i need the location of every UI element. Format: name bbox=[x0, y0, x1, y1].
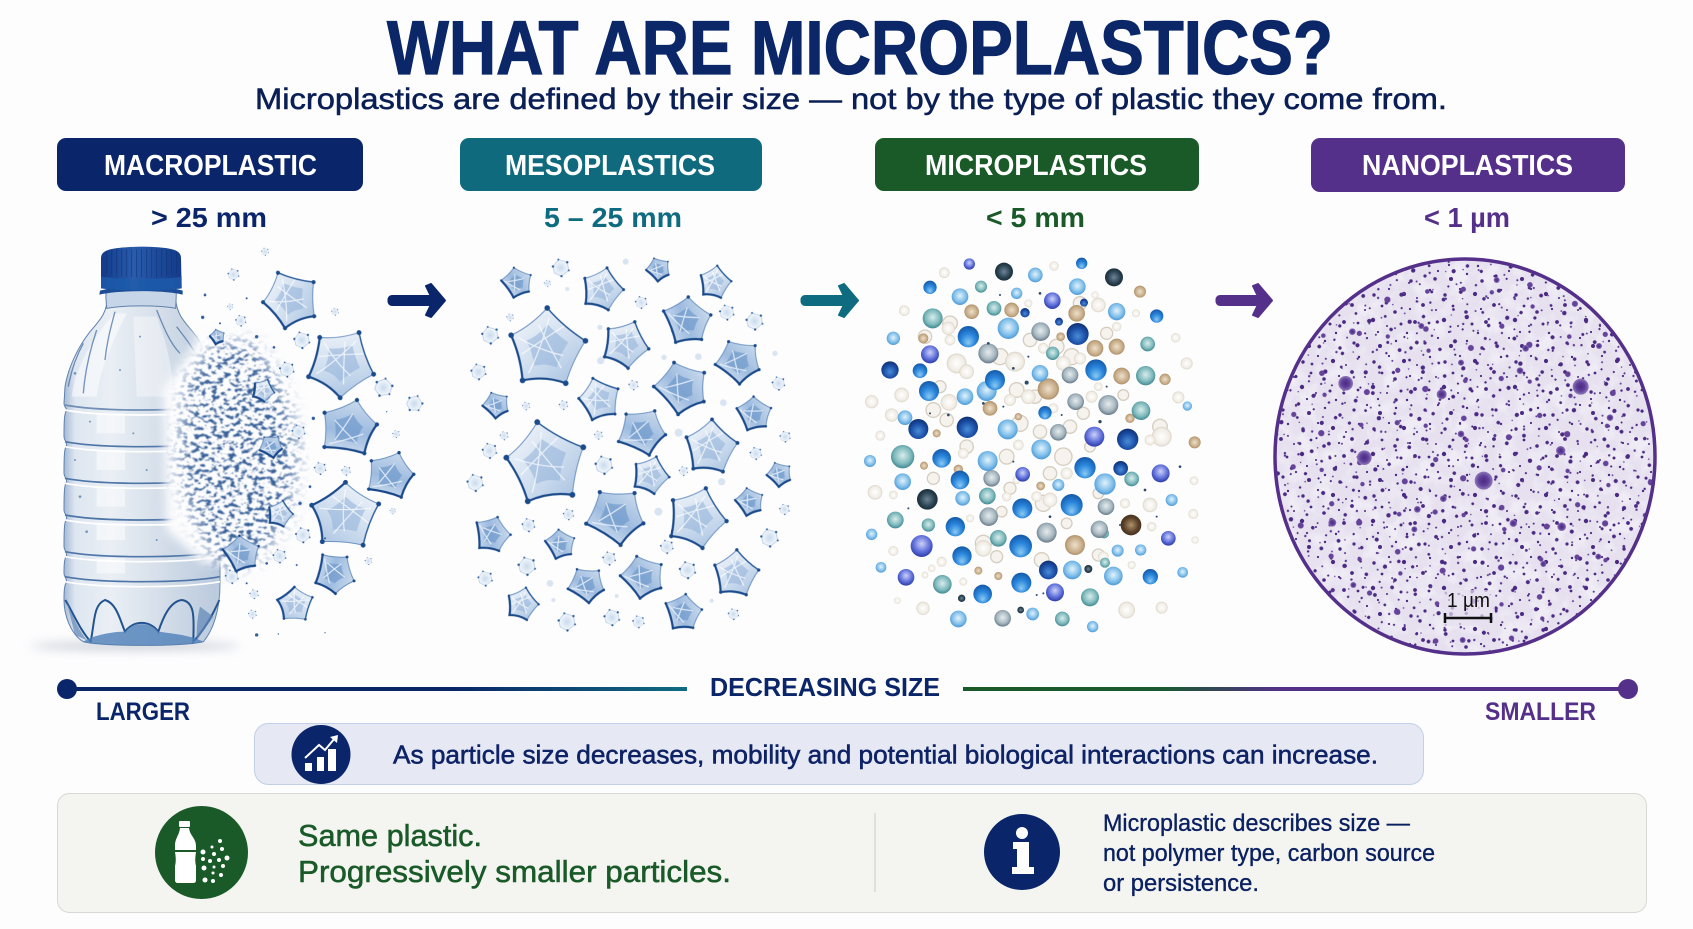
definition text bbox=[1103, 810, 1435, 897]
same plastic text: Same plastic. bbox=[298, 818, 482, 853]
panel background bbox=[58, 794, 1646, 912]
deep blue beads bbox=[881, 299, 1138, 579]
scale caption: DECREASING SIZE bbox=[710, 672, 940, 702]
microscope field bbox=[1274, 258, 1656, 655]
macroplastic size: > 25 mm bbox=[151, 202, 267, 233]
icon: rising chart bbox=[292, 725, 350, 784]
arrow: meso to micro bbox=[801, 284, 858, 317]
microplastics pill bbox=[875, 138, 1199, 191]
bottle bbox=[64, 247, 220, 645]
mesoplastics pill bbox=[460, 138, 762, 191]
mesoplastics label: MESOPLASTICS bbox=[505, 150, 715, 182]
arrow: micro to nano bbox=[1216, 284, 1272, 317]
teal beads bbox=[887, 281, 1155, 626]
illustration: mesoplastic fragments bbox=[464, 257, 791, 639]
pale translucent clutter rings bbox=[918, 297, 1167, 567]
illustration: shattering plastic bottle bbox=[30, 247, 426, 650]
speckled nanoparticles bbox=[1277, 262, 1652, 652]
dark and brown beads bbox=[917, 263, 1123, 613]
microplastics size: < 5 mm bbox=[986, 202, 1085, 233]
right scale line bbox=[963, 687, 1628, 691]
left end dot bbox=[57, 679, 77, 699]
same plastic text: Progressively smaller particles. bbox=[298, 854, 731, 889]
category: microplastics header bbox=[875, 138, 1199, 233]
definition text: Microplastic describes size — bbox=[1103, 810, 1410, 837]
bottom summary panel bbox=[58, 794, 1646, 912]
scale bar bbox=[1445, 613, 1491, 623]
bottle shadow bbox=[30, 642, 240, 650]
dissolving fragment cloud bbox=[166, 330, 310, 580]
definition text: or persistence. bbox=[1103, 870, 1259, 897]
illustration: microplastic beads bbox=[864, 258, 1201, 632]
nanoplastics pill bbox=[1311, 138, 1625, 192]
definition text: not polymer type, carbon source bbox=[1103, 840, 1435, 867]
microscope rim bbox=[1275, 259, 1655, 654]
callout text: As particle size decreases, mobility and potential biological interactions can increase. bbox=[393, 740, 1378, 770]
icon: information bbox=[984, 814, 1060, 890]
arrow: macro to meso bbox=[388, 284, 445, 317]
macroplastic label: MACROPLASTIC bbox=[104, 150, 317, 182]
title: WHAT ARE MICROPLASTICS? bbox=[387, 6, 1333, 91]
scale label: 1 µm bbox=[1447, 590, 1490, 612]
pale translucent beads bbox=[865, 261, 1199, 618]
icon: bottle and particles bbox=[155, 806, 248, 899]
category: nanoplastics header bbox=[1311, 138, 1625, 233]
sky beads bbox=[864, 268, 1192, 632]
larger label: LARGER bbox=[96, 698, 190, 726]
callout: mobility note bbox=[254, 724, 1424, 784]
indigo beads bbox=[898, 258, 1176, 601]
right end dot bbox=[1618, 679, 1638, 699]
mesoplastics size: 5 – 25 mm bbox=[544, 202, 682, 233]
left scale line bbox=[67, 687, 687, 691]
grey beads bbox=[978, 322, 1118, 627]
nanoplastics label: NANOPLASTICS bbox=[1362, 150, 1573, 182]
smaller label: SMALLER bbox=[1485, 698, 1596, 726]
illustration: nanoplastic microscope view bbox=[1265, 250, 1665, 665]
subtitle: Microplastics are defined by their size — not by the type of plastic they come from. bbox=[255, 83, 1447, 116]
blue beads bbox=[913, 258, 1163, 603]
same plastic text bbox=[298, 818, 731, 889]
tan beads bbox=[918, 286, 1201, 580]
category: mesoplastics header bbox=[460, 138, 762, 233]
microplastics label: MICROPLASTICS bbox=[925, 150, 1147, 182]
macroplastic pill bbox=[57, 138, 363, 191]
callout background bbox=[254, 724, 1424, 784]
nanoplastics size: < 1 µm bbox=[1424, 202, 1510, 233]
decreasing size scale bbox=[57, 672, 1638, 726]
category: macroplastic header bbox=[57, 138, 363, 233]
tiny specks bbox=[907, 292, 1181, 596]
flying fragments bbox=[201, 248, 426, 637]
